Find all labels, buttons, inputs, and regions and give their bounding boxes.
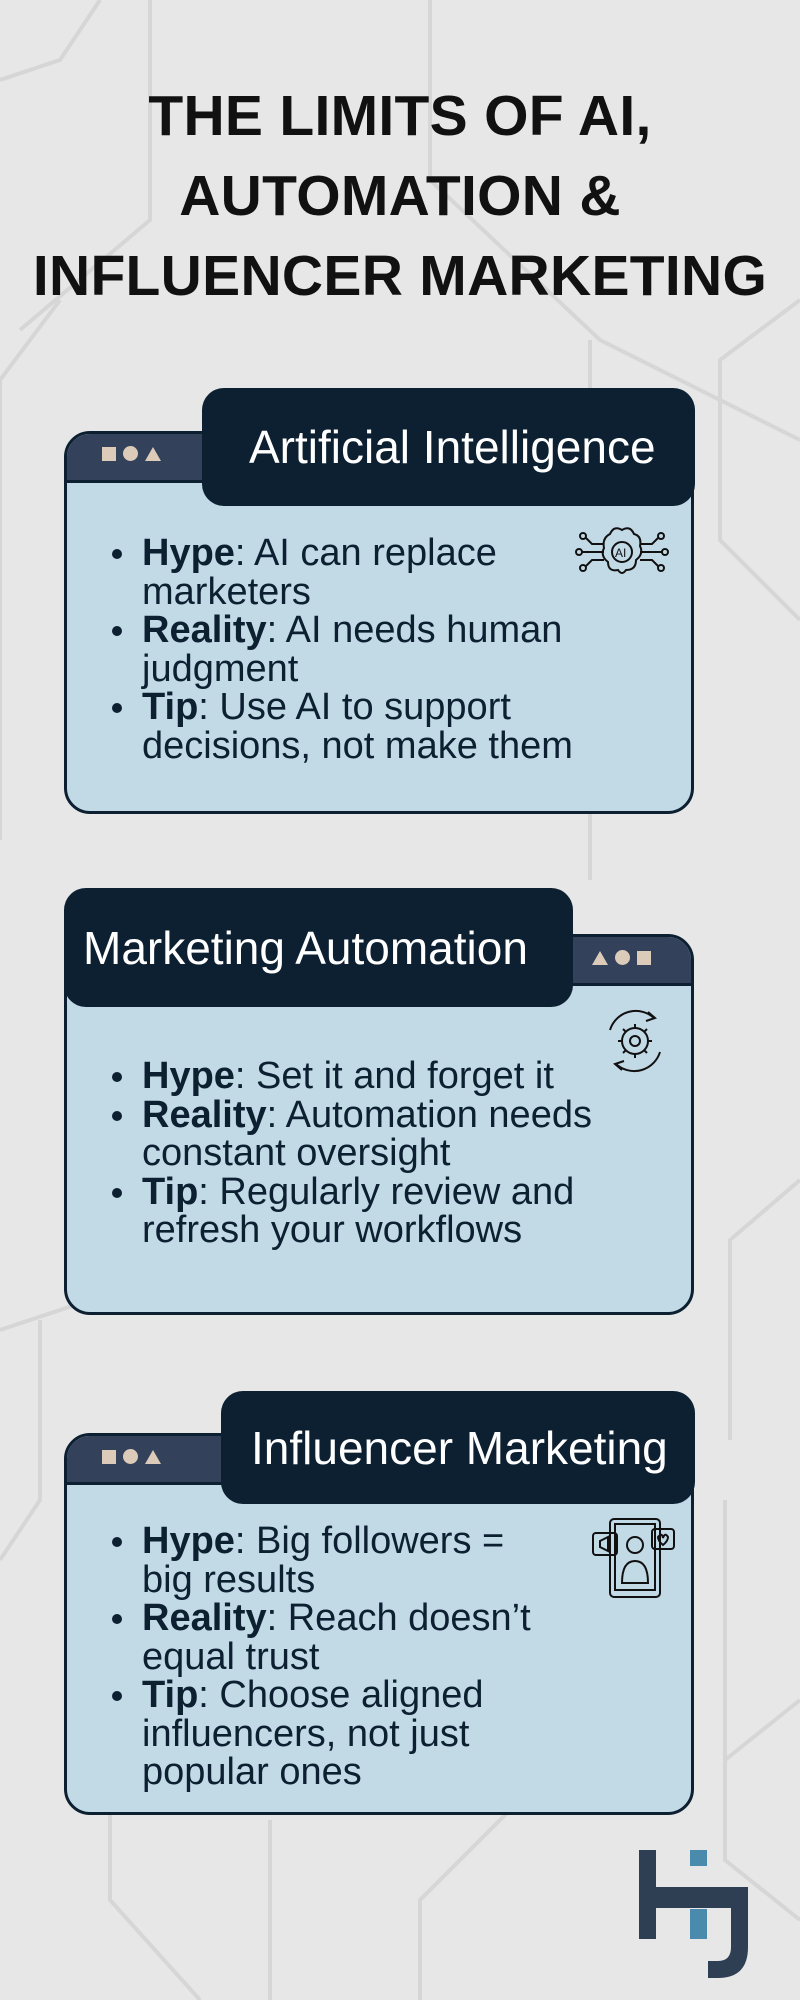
bullet list: Hype: Set it and forget it bbox=[142, 1055, 554, 1097]
bullet list: Tip: Regularly review and bbox=[142, 1170, 574, 1212]
title: INFLUENCER MARKETING bbox=[33, 244, 767, 308]
bullet list bbox=[112, 1520, 531, 1793]
bullet list: constant oversight bbox=[142, 1132, 450, 1174]
panel: influencer marketing bbox=[64, 1391, 695, 1815]
icon: AI brain: AI bbox=[615, 546, 626, 560]
bullet list: refresh your workflows bbox=[142, 1209, 522, 1251]
bullet list: Reality: Reach doesn’t bbox=[142, 1597, 531, 1639]
bullet list bbox=[112, 1055, 592, 1251]
bullet list: big results bbox=[142, 1558, 315, 1600]
tab heading bbox=[202, 388, 695, 506]
bullet list: Reality: AI needs human bbox=[142, 609, 562, 651]
bullet list: Tip: Use AI to support bbox=[142, 686, 511, 728]
panel: marketing automation bbox=[64, 888, 694, 1315]
tab heading: Marketing Automation bbox=[83, 922, 528, 974]
logo bbox=[639, 1850, 748, 1978]
window shapes bbox=[592, 950, 651, 965]
bullet list: judgment bbox=[142, 648, 298, 690]
bullet list bbox=[112, 532, 573, 766]
title: AUTOMATION & bbox=[179, 164, 621, 228]
icon: gear cycle bbox=[609, 1010, 661, 1072]
tab heading bbox=[221, 1391, 695, 1504]
bullet list: Hype: AI can replace bbox=[142, 532, 497, 574]
window shapes bbox=[102, 1449, 161, 1464]
window shapes bbox=[102, 446, 161, 461]
panel box bbox=[64, 1433, 694, 1815]
title bbox=[33, 84, 767, 308]
tab heading bbox=[64, 888, 573, 1007]
bullet list: marketers bbox=[142, 570, 311, 612]
bullet list: Hype: Big followers = bbox=[142, 1520, 504, 1562]
icon: AI brain bbox=[575, 527, 669, 574]
bullet list: decisions, not make them bbox=[142, 724, 573, 766]
bullet list: Tip: Choose aligned bbox=[142, 1674, 484, 1716]
bullet list: Reality: Automation needs bbox=[142, 1094, 592, 1136]
bullet list: influencers, not just bbox=[142, 1712, 469, 1754]
panel box bbox=[64, 431, 694, 814]
tab heading: Artificial Intelligence bbox=[249, 421, 656, 473]
icon: influencer phone bbox=[592, 1518, 675, 1598]
bullet list: popular ones bbox=[142, 1751, 362, 1793]
panel: artificial intelligence bbox=[64, 388, 695, 814]
bullet list: equal trust bbox=[142, 1636, 319, 1678]
panel box bbox=[64, 934, 694, 1315]
tab heading: Influencer Marketing bbox=[251, 1422, 668, 1474]
title: THE LIMITS OF AI, bbox=[148, 84, 652, 148]
